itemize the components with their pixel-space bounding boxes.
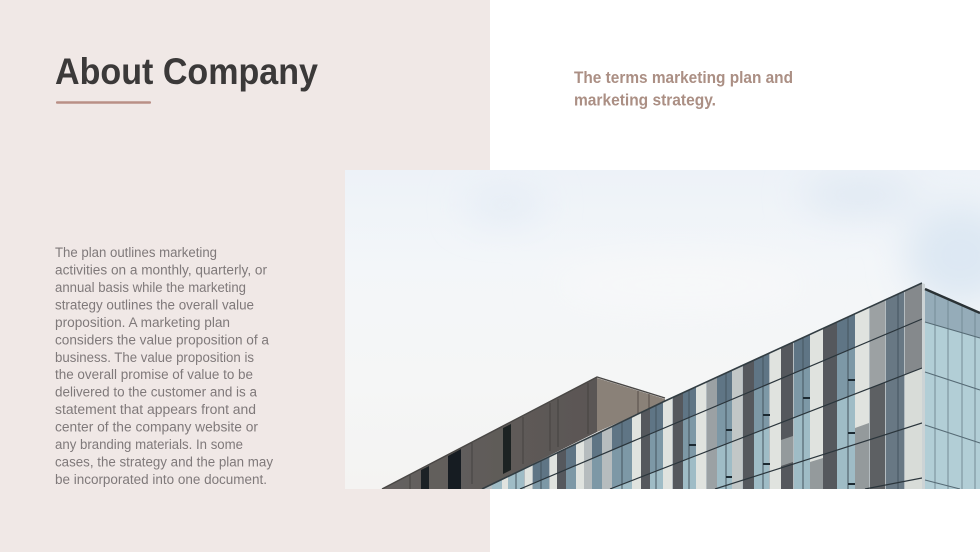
body text block: be incorporated into one document. (55, 472, 267, 487)
body text block: delivered to the customer and is a (55, 385, 258, 400)
glass facade (482, 280, 924, 490)
building corner (922, 283, 925, 489)
body text block: any branding materials. In some (55, 437, 243, 452)
subtitle: The terms marketing plan and (574, 68, 793, 87)
body text block: activities on a monthly, quarterly, or (55, 262, 268, 278)
body text block: cases, the strategy and the plan may (55, 454, 273, 470)
lower-floor panel patches (781, 423, 869, 489)
body text block: proposition. A marketing plan (55, 315, 230, 330)
body text block: business. The value proposition is (55, 350, 254, 365)
body text block: The plan outlines marketing (55, 245, 217, 260)
subtitle: marketing strategy. (574, 90, 716, 110)
heading underline (56, 101, 151, 104)
glass side wall (925, 289, 980, 489)
body text block: the overall promise of value to be (55, 367, 253, 382)
body text block: strategy outlines the overall value (55, 297, 254, 312)
body text block: annual basis while the marketing (55, 280, 246, 295)
panel: left background (0, 0, 490, 552)
body text block: statement that appears front and (55, 402, 256, 417)
subtitle (574, 68, 793, 110)
photo: building against sky (345, 170, 980, 490)
body text block: center of the company website or (55, 420, 259, 435)
body text block (55, 245, 273, 487)
sky (345, 170, 980, 489)
dark building block (382, 377, 665, 489)
heading: About Company: About Company (55, 51, 318, 92)
body text block: considers the value proposition of a (55, 332, 270, 347)
